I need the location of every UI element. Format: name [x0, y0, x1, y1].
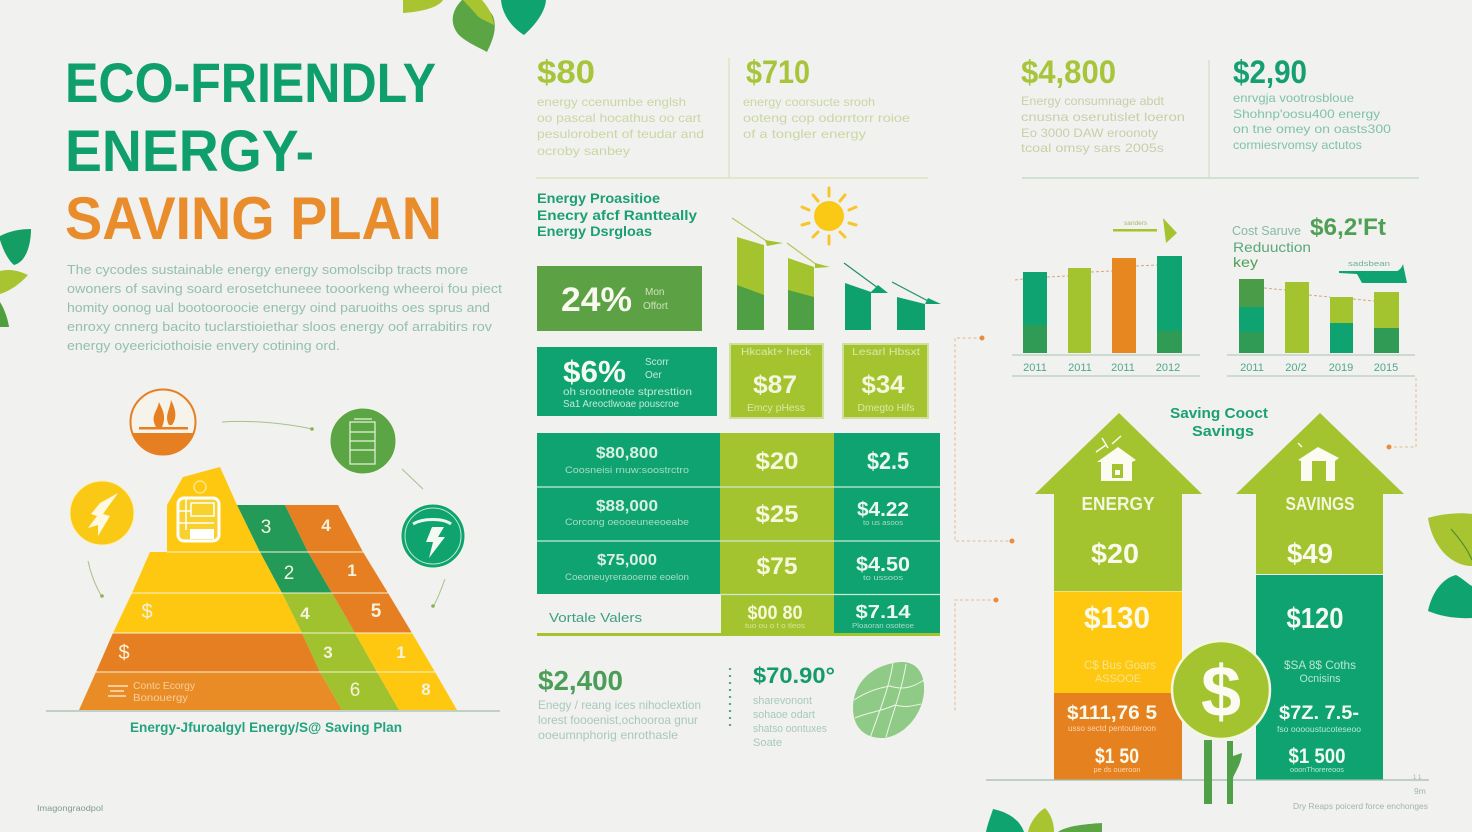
stat: $2,400: lorest foooenist,ochooroa gnur [538, 713, 698, 727]
saving cost heading [1170, 405, 1268, 440]
stat: $710: energy coorsucte srooh [743, 95, 875, 109]
table: third column: $4.50 [856, 554, 910, 576]
bar chart: right: 2015 [1374, 362, 1398, 374]
decorative leaves: top [403, 0, 546, 52]
pyramid: labels: 4 [321, 516, 331, 535]
title: SAVING PLAN [65, 185, 442, 252]
pyramid: labels: $ [141, 601, 153, 623]
connector arrows around pyramid [88, 421, 445, 608]
arrow column: savings: $120 [1286, 603, 1344, 635]
title: ENERGY- [65, 119, 314, 184]
stat: $70.90: $70.90° [753, 663, 835, 688]
pyramid: labels: 1 [396, 643, 406, 662]
footer note: right: 9m [1414, 786, 1426, 796]
intro paragraph: homity oonog ual bootooroocie energy oind paruoiths oes sprus and [67, 300, 490, 315]
pyramid: base label [108, 681, 195, 704]
stat: $2,400 [538, 665, 701, 742]
arrow column: savings: ooonThorereoos [1290, 765, 1344, 774]
table: first column: $75,000 [597, 552, 657, 569]
ground line [986, 779, 1429, 781]
panel: 24% stat [537, 266, 702, 331]
stat: $2,90: Shohnp'oosu400 energy [1233, 107, 1380, 121]
table: first column: Corcong oeooeuneeoeabe [565, 517, 689, 528]
stat: $80: oo pascal hocathus oo cart [537, 111, 702, 125]
arrow column: energy: ASSOOE [1095, 673, 1141, 685]
stats row: right group [1021, 54, 1419, 178]
table: second column: $25 [756, 501, 798, 528]
intro paragraph: enroxy cnnerg bacito tuclarstioiethar sloos energy oof arrabitirs rov [67, 319, 493, 334]
panel: 24% stat: Mon [645, 287, 664, 298]
pyramid: right segments [285, 505, 457, 710]
icon: dollar coin [1172, 641, 1270, 739]
stat: $710: ooteng cop odorrtorr roioe [743, 111, 910, 125]
arrow column: energy: $1 50 [1095, 745, 1139, 768]
chart heading: right [1232, 214, 1386, 270]
pyramid: base label: Bonouergy [133, 693, 188, 704]
downward bar chart with arrows [732, 218, 941, 330]
pyramid: labels: $ [118, 642, 130, 664]
table: first column [565, 445, 689, 583]
dotted divider [729, 668, 731, 726]
chart legend: left [1113, 218, 1177, 243]
intro paragraph: energy oyeericiothoisie envery cotining ord. [67, 338, 340, 353]
icon: green battery circle [330, 408, 396, 474]
bar chart: left: 2011 [1068, 362, 1092, 374]
chart legend: right [1339, 259, 1407, 283]
arrow column: energy: ENERGY [1082, 494, 1154, 514]
stat: $80: $80 [537, 54, 595, 90]
bar chart: right: 2019 [1329, 362, 1353, 374]
table: second column: $00 80 [748, 603, 802, 624]
bar chart: right: 2011 [1240, 362, 1264, 374]
intro paragraph: The cycodes sustainable energy energy somolscibp tracts more [67, 262, 468, 277]
panel: 24% stat: 24% [561, 281, 632, 319]
arrow column: savings: $7Z. 7.5- [1279, 703, 1359, 724]
panel: $34 stat [843, 344, 928, 418]
stat: $2,90: enrvgja vootrosbloue [1233, 91, 1354, 105]
icon: orange flame circle [130, 390, 196, 454]
panel: $34 stat: Dmegto Hifs [858, 403, 914, 414]
panel: $87 stat [730, 344, 823, 418]
pyramid: labels [118, 516, 431, 701]
pyramid baseline [46, 710, 500, 712]
panel: $6% stat: oh srootneote stpresttion [563, 387, 692, 398]
stat: $2,90 [1233, 54, 1391, 152]
stat: $4,800: $4,800 [1021, 54, 1116, 90]
chart heading: right: Cost Saruve [1232, 223, 1301, 238]
icon: plant stems [1204, 740, 1242, 804]
table: row label: Vortale Valers [549, 610, 643, 625]
arrow column: savings: $1 500 [1288, 745, 1346, 768]
table: third column: $7.14 [856, 602, 910, 622]
stat: $4,800: Eo 3000 DAW eroonoty [1021, 126, 1158, 140]
dashed connectors [955, 336, 1416, 713]
stat: $2,90: cormiesrvomsy actutos [1233, 138, 1362, 152]
table: first column: Coosneisi rnuw:soostrctro [565, 465, 689, 476]
stats row: left group [536, 54, 928, 178]
table: third column: $2.5 [867, 448, 909, 475]
footer note: right: 1 1 [1413, 775, 1422, 781]
icon: teal lightning circle [401, 504, 465, 568]
pyramid: labels: 3 [323, 643, 333, 662]
chart heading: right: key [1233, 254, 1258, 270]
icon: yellow lightning circle [70, 481, 134, 545]
pyramid: labels: 5 [371, 601, 382, 622]
panel: 24% stat: Offort [643, 301, 668, 312]
stat: $2,400: ooeumnphorig enrothasle [538, 728, 678, 742]
panel: $87 stat: Hkcakt+ heck [741, 347, 812, 358]
table: first column: $88,000 [596, 498, 658, 515]
stat: $70.90: sohaoe odart [753, 709, 815, 721]
pyramid: labels: 1 [347, 561, 357, 580]
bar chart: right: 20/2 [1285, 362, 1307, 374]
decorative leaves: right [1428, 513, 1472, 618]
arrow column: energy: $111,76 5 [1067, 703, 1157, 724]
table: third column: to us asoos [863, 520, 904, 527]
arrow column: savings: SAVINGS [1286, 494, 1354, 514]
table: third column: $4.22 [857, 499, 909, 521]
arrow column: energy: $20 [1091, 538, 1139, 569]
chart heading: right: Reduuction [1233, 239, 1311, 255]
panel: $6% stat: Scorr [645, 357, 670, 368]
stat: $710 [743, 54, 910, 141]
table: second column: $20 [756, 448, 798, 475]
chart legend: right: sadsbean [1348, 259, 1390, 268]
stat: $2,90: on tne omey on oasts300 [1233, 122, 1391, 136]
arrow column: savings: fso ooooustucoteseoo [1277, 725, 1362, 734]
pyramid: labels: 2 [284, 563, 294, 584]
icon: round leaf [853, 662, 924, 738]
icon: backpack [178, 481, 219, 541]
bar chart: left: 2011 [1111, 362, 1135, 374]
intro paragraph [67, 262, 502, 353]
panel: $34 stat: $34 [862, 371, 905, 399]
panel: $6% stat: Oer [645, 370, 662, 381]
footer note: left: Imagongraodpol [37, 804, 103, 813]
icon: house [1298, 443, 1339, 481]
table: third column: to ussoos [863, 575, 904, 582]
pyramid: labels: 3 [261, 517, 271, 538]
arrow column: energy: $130 [1084, 600, 1150, 635]
chart legend: left: sanders [1124, 220, 1148, 227]
stat: $70.90: Soate [753, 737, 782, 749]
panel: $6% stat: $6% [563, 354, 626, 389]
arrow column: savings: $49 [1287, 538, 1333, 569]
arrow column: energy [1035, 413, 1202, 780]
bar chart: left: 2011 [1023, 362, 1047, 374]
title: ECO-FRIENDLY [65, 51, 436, 114]
stat: $70.90: sharevonont [753, 695, 812, 707]
arrow column: savings [1236, 413, 1404, 780]
energy heading [537, 190, 697, 239]
panel: $6% stat [537, 347, 717, 416]
arrow column: energy: pe ds oueroon [1094, 765, 1140, 774]
energy heading: Energy Dsrgloas [537, 223, 652, 239]
pyramid chart [79, 467, 457, 710]
pyramid caption: Energy-Jfuroalgyl Energy/S@ Saving Plan [130, 719, 402, 735]
stat: $80 [537, 54, 704, 158]
stat: $4,800: Energy consumnage abdt [1021, 94, 1165, 108]
bar chart: left: 2012 [1156, 362, 1180, 374]
saving cost heading: Saving Cooct [1170, 405, 1268, 422]
chart heading: right: $6,2'Ft [1310, 214, 1386, 241]
stat: $80: energy ccenumbe englsh [537, 95, 686, 109]
stat: $2,400: $2,400 [538, 665, 623, 696]
intro paragraph: owoners of saving soard erosetchuneee tooorkeng wheeroi fou piect [67, 281, 502, 296]
stat: $710: $710 [746, 54, 810, 90]
table: second column: tuo ou o t o tleos [745, 623, 806, 630]
arrow column: savings: Ocnisins [1300, 673, 1341, 685]
panel: $87 stat: Emcy pHess [747, 403, 805, 414]
icon: dollar coin: $ [1201, 652, 1241, 732]
panel: $6% stat: Sa1 Areoctlwoae pouscroe [563, 399, 679, 410]
title [65, 51, 442, 252]
bar chart: right [1227, 214, 1415, 376]
arrow column: energy: usso sectd pentouteroon [1068, 724, 1156, 733]
stat: $70.90: shatso oontuxes [753, 723, 827, 735]
table: second column [745, 448, 806, 630]
decorative leaves: bottom [986, 808, 1102, 832]
saving cost heading: Savings [1192, 423, 1254, 440]
pyramid: left segments [79, 467, 342, 710]
table: third column [852, 448, 914, 630]
pyramid: labels: 8 [421, 680, 431, 699]
footer note: right [1293, 775, 1428, 811]
panel: $34 stat: Lesarl Hbsxt [852, 347, 920, 358]
energy heading: Enecry afcf Rantteally [537, 207, 697, 223]
table: first column: $80,800 [596, 445, 658, 462]
table: third column: Ploaoran osoteoe [852, 621, 914, 630]
stat: $70.90 [753, 663, 835, 749]
stat: $4,800: cnusna oserutislet loeron [1021, 110, 1185, 124]
pyramid: labels: 4 [300, 604, 310, 623]
arrow column: savings: $SA 8$ Coths [1284, 658, 1356, 672]
stat: $80: ocroby sanbey [537, 144, 630, 158]
stat: $2,90: $2,90 [1233, 54, 1307, 90]
pyramid: base label: Contc Ecorgy [133, 681, 195, 692]
savings table [537, 433, 940, 636]
stat: $710: of a tongler energy [743, 127, 866, 141]
table: second column: $75 [756, 553, 798, 580]
footer note: right: Dry Reaps poicerd force enchonges [1293, 801, 1428, 811]
stat: $2,400: Enegy / reang ices nihoclextion [538, 698, 701, 712]
pyramid: labels: 6 [350, 680, 360, 701]
bar chart: left [1012, 218, 1200, 376]
arrow column: energy: C$ Bus Goars [1084, 658, 1156, 672]
energy heading: Energy Proasitioe [537, 190, 660, 206]
decorative leaves: left [0, 229, 31, 327]
stat: $4,800 [1021, 54, 1185, 155]
stat: $80: pesulorobent of teudar and [537, 127, 704, 141]
icon: house [1096, 436, 1136, 481]
stat: $4,800: tcoal omsy sars 2005s [1021, 141, 1164, 155]
panel: $87 stat: $87 [753, 371, 797, 399]
table: first column: Coeoneuyreraooeme eoelon [565, 572, 689, 583]
pyramid: middle segments [237, 505, 399, 710]
icon: sun [802, 188, 856, 244]
